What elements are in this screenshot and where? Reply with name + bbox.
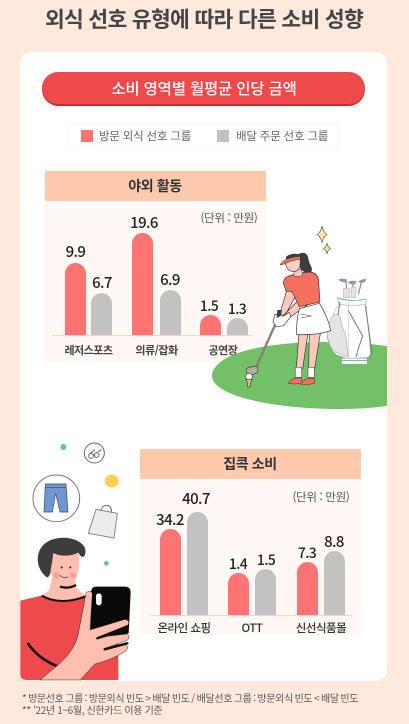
unit label: (단위 : 만원)	[292, 489, 350, 505]
neck	[41, 575, 86, 603]
skirt	[297, 303, 331, 335]
illustration: person with phone	[20, 538, 131, 680]
bar chart: home consumption: 34.2	[156, 509, 184, 530]
visor	[280, 256, 301, 265]
illustration: golf bag	[327, 279, 372, 364]
collar	[42, 596, 86, 601]
bar chart: home consumption: 신선식품몰	[296, 620, 347, 636]
bar chart: outdoor activities: 공연장	[209, 342, 238, 358]
panel: outdoor activities	[45, 171, 266, 363]
gloves	[273, 312, 291, 327]
ponytail	[299, 253, 312, 273]
bar chart: home consumption: 7.3	[298, 543, 317, 563]
bar chart: outdoor activities: 의류/잡화	[135, 342, 178, 358]
bar chart: outdoor activities: 19.6	[130, 212, 158, 233]
arms	[280, 288, 311, 319]
phone	[91, 587, 131, 643]
title: 외식 선호 유형에 따라 다른 소비 성향	[45, 3, 364, 34]
bar chart: outdoor activities: 1.3	[228, 299, 247, 319]
icon: glasses	[84, 443, 104, 463]
shirt	[283, 272, 320, 307]
legend: 방문 외식 선호 그룹	[99, 128, 191, 144]
illustration: golf green	[212, 342, 387, 409]
panel heading: outdoor activities: 야외 활동	[128, 176, 182, 196]
footnotes: * 방문선호 그룹 : 방문외식 빈도 > 배달 빈도 / 배달선호 그룹 : 방문외식 빈도 < 배달 빈도	[22, 690, 358, 705]
bar chart: home consumption: 1.4	[229, 554, 248, 574]
bar chart: outdoor activities: 1.5	[200, 296, 219, 316]
icon: shopping bag	[88, 505, 117, 538]
bar chart: outdoor activities: 6.7	[92, 272, 112, 293]
legend	[68, 124, 339, 146]
golf club and ball	[246, 325, 275, 387]
panel: main card	[20, 52, 387, 681]
illustration: golfer	[246, 253, 331, 387]
illustration: shopping decorations	[33, 443, 119, 566]
bar chart: home consumption: OTT	[242, 620, 263, 636]
panel heading: home consumption	[140, 449, 361, 479]
finger gaps	[97, 629, 127, 649]
banner: section heading: 소비 영역별 월평균 인당 금액	[111, 77, 297, 99]
bar chart: outdoor activities: 9.9	[66, 241, 85, 262]
icon: jeans	[33, 475, 80, 522]
panel heading: home consumption: 집콕 소비	[223, 454, 277, 474]
footnotes	[22, 690, 358, 717]
panel heading: outdoor activities	[45, 171, 266, 201]
bar chart: home consumption	[150, 488, 352, 636]
hand	[40, 591, 129, 680]
sleeve fold	[28, 644, 56, 666]
bar chart: home consumption: 온라인 쇼핑	[157, 620, 211, 636]
bar chart: outdoor activities: 레저스포츠	[64, 342, 113, 358]
bar chart: outdoor activities: 6.9	[160, 269, 180, 290]
bar chart: outdoor activities	[52, 212, 253, 358]
unit label: (단위 : 만원)	[200, 210, 258, 226]
bar chart: home consumption: 8.8	[324, 531, 344, 552]
shirt	[20, 596, 118, 680]
hair	[38, 538, 85, 578]
panel: home consumption	[140, 449, 361, 636]
green dots	[60, 444, 109, 566]
socks and shoes	[295, 367, 314, 377]
face	[49, 553, 79, 585]
neck	[294, 269, 303, 277]
yellow dot	[105, 475, 119, 487]
legs	[296, 332, 321, 368]
footnotes: ** ’22년 1~6월, 신한카드 이용 기준	[22, 702, 162, 717]
bar chart: home consumption: 40.7	[182, 488, 210, 509]
legend: 배달 주문 선호 그룹	[236, 128, 328, 144]
banner: section heading	[42, 72, 365, 106]
illustration: sparkles	[317, 226, 330, 254]
head	[285, 258, 300, 271]
bar chart: home consumption: 1.5	[257, 550, 276, 570]
